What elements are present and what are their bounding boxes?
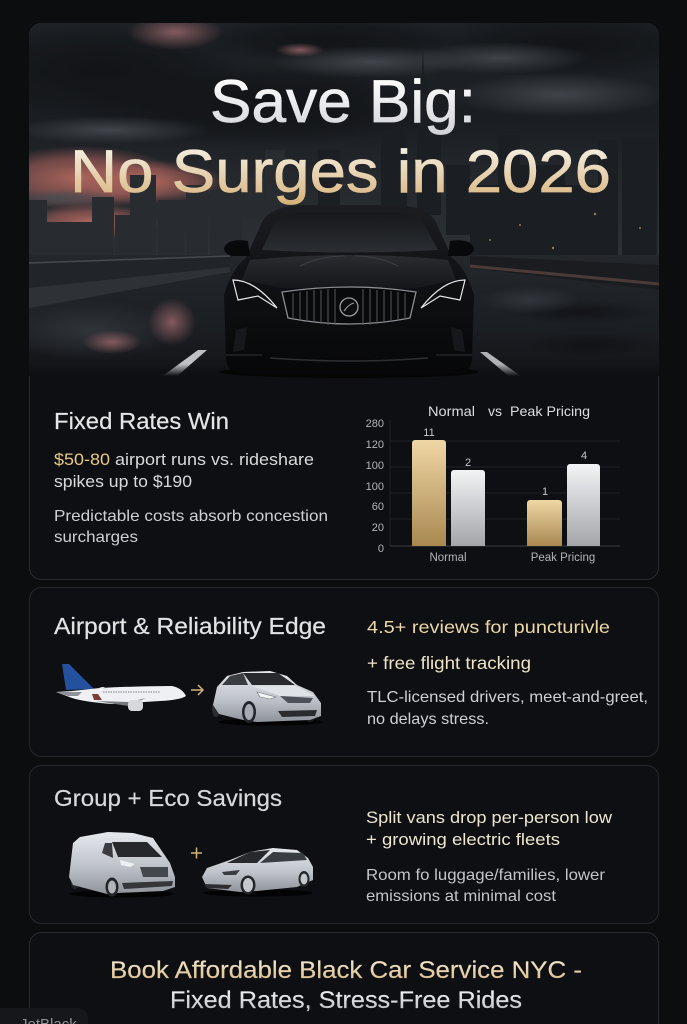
road reflections: [551, 307, 610, 316]
icon: passenger van: [69, 832, 175, 898]
text: predictable costs: [54, 508, 328, 546]
panel: airport and reliability: [30, 588, 658, 756]
bar chart: normal vs peak pricing: Peak Pricing: [510, 403, 590, 419]
bar chart: normal vs peak pricing: 280: [366, 418, 384, 430]
text: airport run prices: $50-80 airport runs vs. rideshare: [54, 451, 314, 469]
black car: [219, 205, 479, 378]
bar chart: normal vs peak pricing: 60: [372, 501, 384, 513]
bar chart: normal vs peak pricing: 0: [378, 543, 384, 555]
text: licensed drivers: no delays stress.: [367, 711, 489, 728]
text: reviews and flight tracking: + free flight tracking: [367, 653, 531, 673]
right barrier: [470, 256, 659, 290]
text: licensed drivers: TLC-licensed drivers, meet-and-greet,: [367, 689, 648, 706]
icon: plus sign: [191, 848, 202, 858]
text: room for luggage: Room fo luggage/families, lower: [366, 867, 606, 884]
text: room for luggage: emissions at minimal cost: [366, 888, 557, 905]
text: split vans: + growing electric fleets: [366, 831, 560, 849]
bar chart: normal vs peak pricing: Normal: [429, 552, 467, 564]
bar chart: normal vs peak pricing: vs: [488, 403, 502, 419]
bar chart: normal vs peak pricing: 1: [542, 486, 548, 498]
bar chart: normal vs peak pricing: Peak Pricing: [531, 552, 595, 564]
hero image: rainy city skyline and road: [29, 23, 659, 376]
road: [29, 255, 659, 376]
bar chart: normal vs peak pricing: 4: [581, 450, 587, 462]
cta subline: Fixed Rates, Stress-Free Rides: [170, 987, 522, 1014]
cta headline: Book Affordable Black Car Service NYC -: [110, 957, 582, 984]
text: split vans: [366, 809, 612, 849]
title: [70, 68, 611, 205]
skyline: [29, 150, 285, 240]
arrow: plane to car: [191, 685, 203, 695]
text: licensed drivers: [367, 689, 648, 728]
text: split vans: Split vans drop per-person low: [366, 809, 612, 827]
bar chart: normal vs peak pricing: 2: [465, 457, 471, 469]
bar chart: normal vs peak pricing: 20: [372, 522, 384, 534]
text: reviews and flight tracking: 4.5+ reviews for puncturivle: [367, 617, 610, 637]
title: No Surges in 2026: [70, 138, 611, 205]
title: Save Big:: [210, 68, 476, 135]
panel: hero and fixed rates: [29, 23, 659, 580]
panel: group and eco: [30, 766, 658, 924]
bar chart: normal vs peak pricing: 11: [423, 427, 435, 439]
heading: airport and reliability edge: Airport & Reliability Edge: [54, 613, 326, 639]
text: predictable costs: Predictable costs absorb concestion: [54, 508, 328, 525]
bar chart: normal vs peak pricing: 100: [366, 481, 384, 493]
heading: fixed rates win: Fixed Rates Win: [54, 408, 229, 434]
heading: group and eco savings: Group + Eco Savings: [54, 785, 282, 811]
text: predictable costs: surcharges: [54, 529, 138, 546]
left barrier: [29, 256, 230, 310]
text: airport run prices: spikes up to $190: [54, 473, 192, 491]
logo tab: [0, 1008, 88, 1024]
bar chart: normal vs peak pricing: Normal: [428, 403, 475, 419]
bar chart: normal vs peak pricing: [366, 403, 620, 564]
panel: call to action: [30, 932, 658, 1024]
bar chart: normal vs peak pricing: 100: [366, 460, 384, 472]
text: reviews and flight tracking: [367, 617, 610, 673]
road lane markings: [164, 350, 207, 376]
bar chart: normal vs peak pricing: 120: [366, 439, 384, 451]
text: airport run prices: [54, 451, 314, 491]
text: room for luggage: [366, 867, 606, 905]
icon: electric car: [202, 848, 313, 896]
icon: airplane: [56, 664, 186, 711]
icon: silver car: [212, 671, 322, 726]
